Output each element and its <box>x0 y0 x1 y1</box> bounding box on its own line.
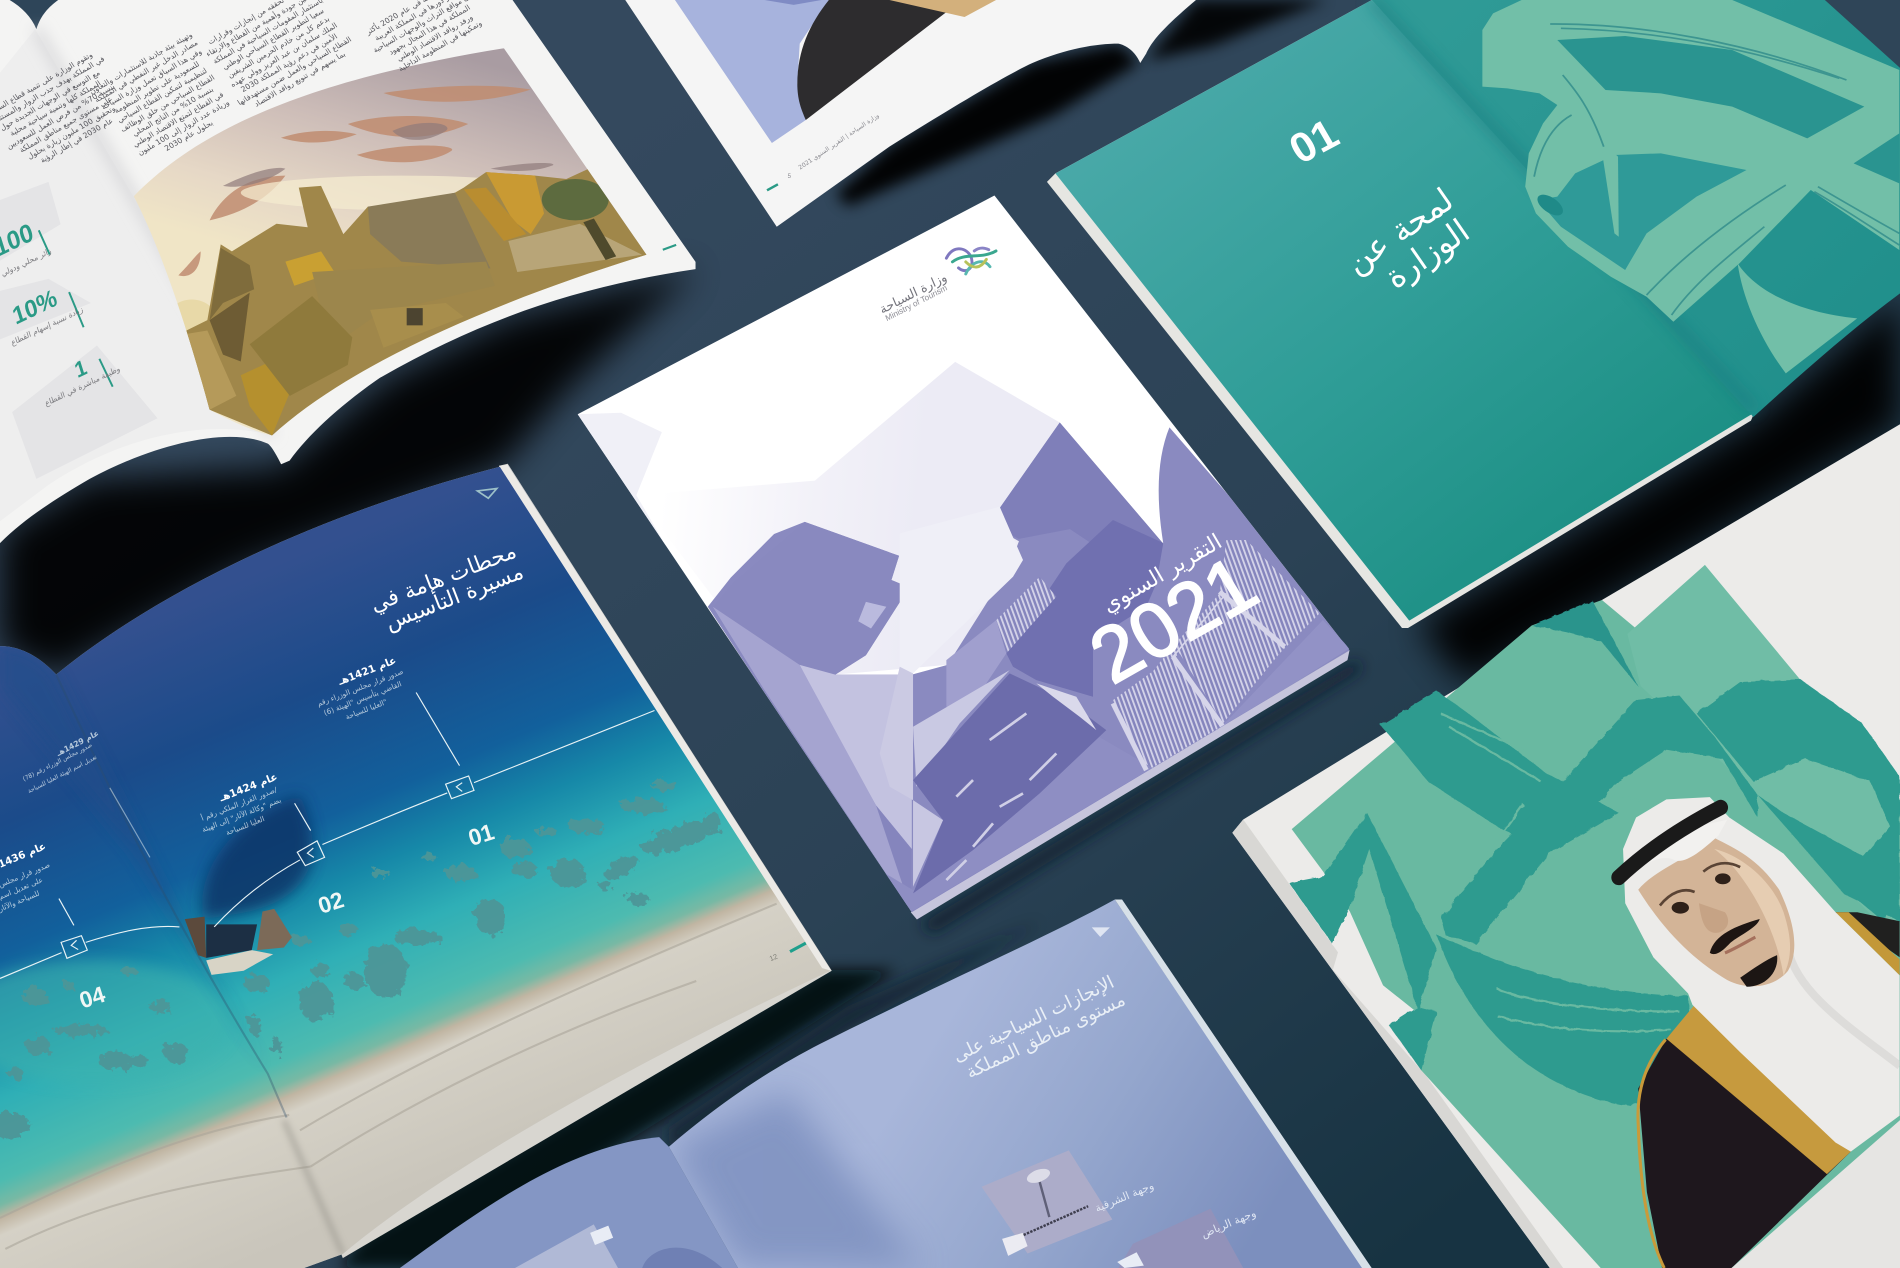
column 2: لتنظيمية لتمكين القطاع السياحي <box>115 66 209 124</box>
portrait of King Salman <box>1619 797 1900 1268</box>
column 1 <box>0 46 139 178</box>
column 2: وفي هذا السياق تعمل وزارة السياحة <box>99 47 204 111</box>
magazine: lavender destinations spread <box>400 899 1372 1268</box>
gutter shade on right page <box>669 1091 921 1268</box>
column 1: عام 2030 في إطار الرؤية <box>38 116 115 165</box>
stat: 1 million: وظيفة مباشرة في القطاع <box>44 364 121 408</box>
gold trim right <box>1836 912 1900 975</box>
nose <box>1699 903 1728 933</box>
stat: 1 million: 1 <box>72 355 90 383</box>
column 4: ورفد روافد الاقتصاد الوطني <box>395 12 475 63</box>
palm <box>589 220 611 258</box>
column 1: مع التوسع في الوجهات الجديدة حول <box>0 68 102 132</box>
upper building <box>1000 422 1162 542</box>
white page edge <box>499 465 831 971</box>
right arc <box>1697 680 1900 921</box>
dark spot <box>1534 191 1567 219</box>
upper arc <box>1441 696 1758 944</box>
left building shade <box>804 522 900 674</box>
section number: 01 <box>1281 110 1346 173</box>
column 1: بنسبة 70% من فرص العمل للسعوديين <box>5 82 116 151</box>
book gutter fold <box>56 674 287 1118</box>
page block <box>0 0 696 543</box>
column 2: وتهيئة بيئة جاذبة للاستثمارات والتعاون <box>88 30 194 96</box>
tan image strip <box>889 0 996 17</box>
destination thumbnail: riyadh <box>1118 1209 1243 1268</box>
timeline entry 1429: تعديل اسم الهيئة العليا للسياحة <box>27 754 98 795</box>
column 1: على مستوى جميع مناطق المملكة <box>18 94 114 154</box>
section title: لمحة عن <box>1338 181 1460 281</box>
column 3: الأمين في دعم رؤية المملكة 2030 <box>239 31 339 94</box>
timeline entry 1421: عام 1421هـ <box>336 655 398 688</box>
light brush silhouette <box>1482 0 1899 322</box>
timeline numbers: 04 <box>76 981 108 1013</box>
reef patches <box>0 780 722 1139</box>
page <box>625 0 1196 227</box>
column 2: القطاع السياحي من خلق الوظائف <box>119 73 216 134</box>
left page shading <box>0 29 271 521</box>
cover artwork <box>578 362 1376 917</box>
green page marker <box>663 245 676 250</box>
destination label: riyadh: وجهة الرياض <box>1199 1206 1258 1241</box>
green marker <box>767 184 778 190</box>
paper edge stack <box>1232 819 1563 1268</box>
spread pages <box>0 465 830 1268</box>
light vertical facade <box>800 665 912 849</box>
timeline <box>0 692 654 978</box>
bottom band <box>886 764 1152 911</box>
column 2: في القطاع لتمتع الاقتصاد الوطني <box>131 90 226 149</box>
column 3: الملك سلمان بن عبد العزيز وولي عهده <box>229 21 339 89</box>
ghutra peak over face <box>1630 820 1727 872</box>
green field right page <box>1627 565 1900 946</box>
sand tracks <box>0 904 777 1249</box>
column 2: بنسبة 10% من الناتج المحلي <box>131 85 215 138</box>
pale sky <box>743 362 1060 674</box>
timeline entry 1424: العليا للسياحة <box>224 814 266 837</box>
teal calligraphy brush strokes <box>1289 601 1900 1106</box>
column 3: بدعم كل من خادم الحرمين الشريفين <box>226 14 331 80</box>
ministry english name: Ministry of Tourism <box>884 283 949 323</box>
cover thickness <box>911 650 1350 919</box>
page number: 5 <box>788 174 792 180</box>
timeline entry 1424: عام 1424هـ <box>217 771 279 805</box>
slatted balcony lower right <box>1153 540 1319 723</box>
lower swoosh <box>1738 263 1857 373</box>
moustache <box>1710 919 1760 954</box>
left page dark shade <box>0 646 218 988</box>
dark shaded band <box>1006 520 1163 697</box>
column 2 <box>87 30 242 169</box>
brush calligraphy artwork <box>1482 0 1899 373</box>
magazine: blue sea timeline spread <box>0 461 852 1268</box>
stat: 10% <box>9 284 84 347</box>
column 1: وتحقيق 100 مليون زيارة بحلول <box>26 104 117 161</box>
column 3 <box>198 0 358 115</box>
body text columns <box>0 0 493 178</box>
timeline numbers <box>76 818 497 1013</box>
timeline entry 1436 <box>0 840 51 914</box>
right page <box>669 899 1363 1268</box>
timeline entry 1421: (6) القاضي بتأسيس "الهيئة <box>322 678 403 717</box>
black agal headband <box>1619 808 1721 877</box>
magazine: royal portrait spread <box>1232 424 1900 1268</box>
gutter shading <box>1372 0 1755 410</box>
timeline markers <box>61 776 474 958</box>
brush drip <box>1600 140 1619 237</box>
lit facade <box>913 670 1010 787</box>
footer text: وزارة السياحة | التقرير السنوي 2021 <box>797 112 881 171</box>
robe trim edge <box>1638 1040 1666 1268</box>
cover lower artwork detail <box>880 507 1350 913</box>
cover title: التقرير السنوي <box>1098 529 1226 618</box>
section title: الوزارة <box>1378 212 1476 296</box>
timeline entry 1424 <box>199 771 282 837</box>
lower arc <box>1437 935 1692 1106</box>
white ghutra and thobe <box>1623 797 1900 1152</box>
heading: الإنجازات السياحية على <box>950 972 1118 1067</box>
fort silhouette <box>176 169 647 436</box>
dark corner outside page <box>1825 0 1900 68</box>
cover sheet <box>578 196 1350 912</box>
page number and marker: 12 <box>768 952 779 963</box>
page edge stack <box>1047 0 1755 628</box>
column 3: القطاع السياحي والعمل ضمن مستهدفاتها <box>236 35 353 107</box>
cover year: 2021 <box>1075 539 1272 700</box>
stat: 100 <box>0 218 53 278</box>
timeline entry 1424: صدور القرار الملكي رقم أ/ <box>199 784 279 823</box>
mouth <box>1725 937 1755 953</box>
column 3: بما يسهم في تنويع روافد الاقتصاد <box>252 49 347 109</box>
destination label: eastern region: وجهة الشرقية <box>1093 1179 1156 1215</box>
stat: 10%: زيادة نسبة إسهام القطاع <box>10 305 84 347</box>
dark arc <box>797 0 962 120</box>
cover logo <box>878 248 996 323</box>
column 2: وزيادة عدد الزوار إلى 100 مليون <box>136 98 231 157</box>
heading: مستوى مناطق المملكة <box>963 989 1129 1083</box>
timeline entry 1421 <box>316 655 405 721</box>
lavender building mass <box>708 422 1376 917</box>
window upper <box>1557 36 1864 138</box>
slatted balcony upper <box>996 577 1056 653</box>
shipwreck <box>185 909 292 975</box>
dry brush scratches <box>1534 24 1899 315</box>
gold trim left <box>1666 1005 1851 1174</box>
page block <box>1232 424 1900 1268</box>
small logo <box>1092 927 1110 937</box>
photo: desert heritage at sunset <box>134 48 646 436</box>
spread title: محطات هامة في <box>367 539 520 618</box>
timeline entry 1429 <box>22 729 100 795</box>
deep water shadow <box>202 796 313 919</box>
thumbnail marker <box>1117 1252 1144 1268</box>
dark shoulder right <box>1836 912 1900 957</box>
page corner white <box>1732 1120 1900 1268</box>
lavender panel <box>675 0 829 143</box>
page gutter shadow <box>36 29 271 435</box>
lower facade <box>913 800 943 887</box>
small logo on blue page <box>477 489 497 498</box>
bisht robe <box>1638 1036 1851 1268</box>
column 2: بحلول عام 2030 <box>163 118 215 153</box>
timeline entry 1424: بضم "وكالة الآثار" إلى الهيئة <box>201 795 282 834</box>
goatee <box>1740 955 1777 987</box>
page number and marker <box>768 943 806 963</box>
green field left page <box>1292 600 1900 1268</box>
magazine: centre cover <box>578 196 1376 919</box>
column 4 <box>360 0 493 79</box>
balcony rail marks <box>946 713 1056 880</box>
column 2: للسعودية على تطوير المنظومة <box>112 59 201 115</box>
magazine: top-right teal spread <box>1047 0 1900 628</box>
ministry name: وزارة السياحة <box>878 270 949 318</box>
left page thumbnail <box>515 1224 722 1268</box>
top notch of desk between pages <box>10 0 58 29</box>
left teal page <box>1055 0 1756 621</box>
window centre <box>1538 153 1747 270</box>
timeline entry 1429: صدور مجلس الوزراء رقم (78) <box>22 742 93 783</box>
dry brush scratches <box>1441 714 1679 1031</box>
right teal page <box>1372 0 1900 417</box>
magazine: top-left open spread with photo <box>0 0 696 543</box>
stat panels faint background <box>0 182 158 479</box>
column 4: المملكة في هذا المجال بجهود <box>387 3 472 57</box>
beams <box>1113 592 1285 770</box>
pale awning <box>1036 683 1096 730</box>
horizon glow <box>240 176 478 210</box>
timeline numbers: 01 <box>465 818 497 851</box>
logo mark <box>946 248 996 274</box>
eyes <box>1672 873 1731 914</box>
clouds <box>178 86 531 276</box>
right bottom margin <box>1217 638 1349 729</box>
column 1: المملكة كلها وتنمية سياحية محلية <box>8 79 103 138</box>
left page <box>400 1137 738 1268</box>
white right edge <box>1115 899 1372 1268</box>
magazine: top-centre open spread <box>625 0 1196 227</box>
destination thumbnail: eastern region <box>982 1150 1112 1256</box>
pale sky gap <box>900 507 1023 673</box>
stat: 100: زائر محلي ودولي <box>0 246 53 278</box>
timeline entry 1429: عام 1429هـ <box>54 729 100 758</box>
window right <box>1854 133 1899 183</box>
left page turquoise shallows <box>0 956 214 1074</box>
spread title: مسيرة التأسيس <box>381 557 527 636</box>
lower dark storefronts <box>913 673 1106 893</box>
column 3: سعيا لتطوير القطاع السياحي الوطني <box>221 6 326 71</box>
page stack edge <box>337 464 832 1258</box>
white margin cut <box>1332 912 1421 1070</box>
stat: 10%: 10% <box>9 284 60 331</box>
timeline entry 1421: صدور قرار مجلس الوزراء رقم <box>316 667 405 708</box>
column 4: وتمكينها في المنظومة الداخلية <box>397 18 484 73</box>
timeline entry 1421: العليا للسياحة" <box>344 697 388 721</box>
face <box>1638 838 1794 986</box>
timeline numbers: 02 <box>315 886 347 919</box>
ghutra shade <box>1788 948 1900 1066</box>
column 2: مصادر الدخل غير النفطي في المملكة <box>93 38 199 104</box>
